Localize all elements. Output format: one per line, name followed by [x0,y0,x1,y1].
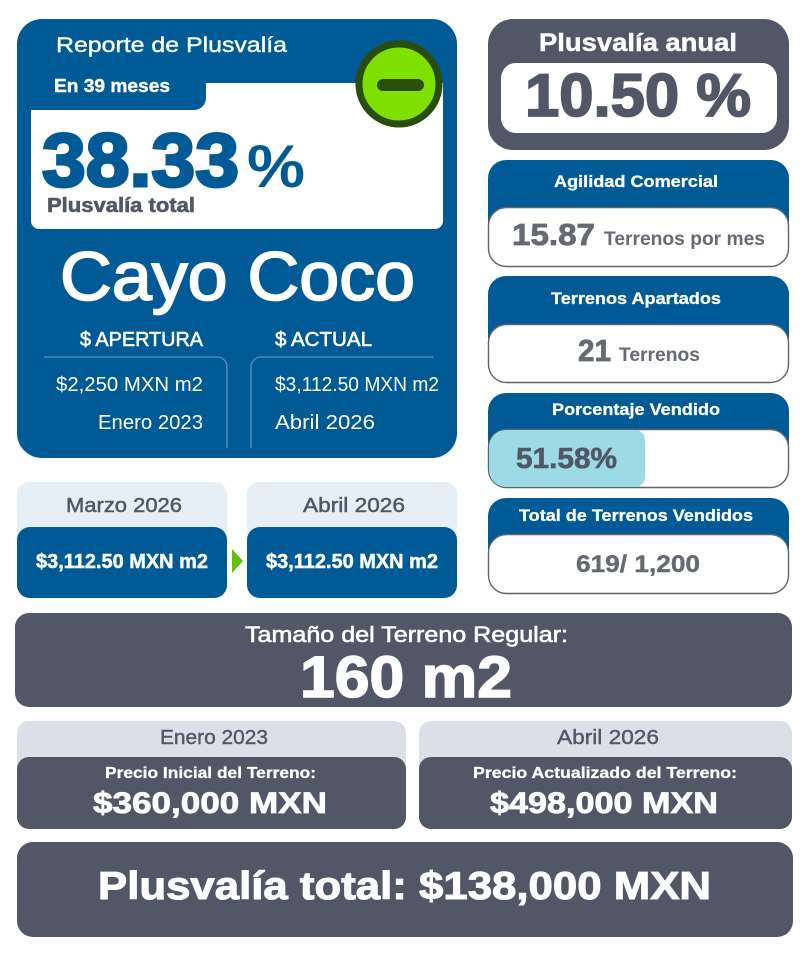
progress bar [489,430,645,487]
column: actual: $ ACTUAL [275,329,372,351]
panel: porcentaje vendido: 51.58% [516,443,617,475]
heading: Reporte de Plusvalía [56,34,287,57]
column: apertura [44,329,227,448]
panel: tamaño del terreno [15,613,792,710]
panel: terrenos apartados: Terrenos [619,345,700,366]
card: abril 2026: Abril 2026 [303,495,405,517]
panel: plusvalía anual [488,19,789,150]
card: marzo 2026: $3,112.50 MXN m2 [36,551,208,573]
card: precio inicial: $360,000 MXN [93,787,327,820]
icon: minus status [359,44,439,124]
card: precio actualizado [419,721,792,829]
panel: total de terrenos vendidos [488,498,789,594]
column: actual [251,329,439,448]
column: apertura: $2,250 MXN m2 [56,374,203,396]
panel: plusvalía anual: Plusvalía anual [539,29,737,57]
card: marzo 2026: Marzo 2026 [66,495,182,517]
card: precio inicial: Precio Inicial del Terreno: [105,765,316,782]
card: precio actualizado: Abril 2026 [557,727,659,749]
panel: agilidad comercial: Agilidad Comercial [554,172,718,191]
column: apertura: $ APERTURA [80,329,204,351]
panel: terrenos apartados: 21 [578,333,611,368]
column: apertura: Enero 2023 [98,412,203,434]
panel: agilidad comercial: Terrenos por mes [604,229,765,250]
panel: porcentaje vendido: Porcentaje Vendido [552,400,720,419]
panel: agilidad comercial [488,160,789,266]
panel: total de terrenos vendidos: Total de Terrenos Vendidos [519,506,753,525]
period tab label: En 39 meses [54,76,170,96]
card: precio inicial [17,721,406,829]
project name: Cayo Coco [60,238,415,315]
panel: reporte de plusvalía [17,19,457,458]
panel: tamaño del terreno: 160 m2 [300,645,512,710]
white result card [31,83,443,229]
card: marzo 2026 [17,482,227,598]
card: precio actualizado: $498,000 MXN [490,787,718,820]
panel: plusvalía total: Plusvalía total: $138,000 MXN [98,865,711,908]
arrow [232,549,243,573]
panel: porcentaje vendido [488,393,789,488]
total percentage: % [247,133,305,200]
panel: plusvalía anual: 10.50 % [525,62,751,129]
column: actual: Abril 2026 [275,412,375,434]
panel: terrenos apartados: Terrenos Apartados [551,289,721,308]
panel: total de terrenos vendidos: 619/ 1,200 [576,551,700,578]
card: abril 2026: $3,112.50 MXN m2 [266,551,438,573]
panel: tamaño del terreno: Tamaño del Terreno Regular: [245,622,568,647]
panel: plusvalía total [17,842,793,937]
column: actual: $3,112.50 MXN m2 [275,374,439,396]
card: abril 2026 [247,482,457,598]
total percentage: 38.33 [42,118,239,202]
panel: terrenos apartados [488,276,789,382]
card: precio actualizado: Precio Actualizado del Terreno: [473,765,737,782]
card: precio inicial: Enero 2023 [160,727,268,749]
panel: agilidad comercial: 15.87 [512,217,595,252]
total label: Plusvalía total [47,195,195,217]
